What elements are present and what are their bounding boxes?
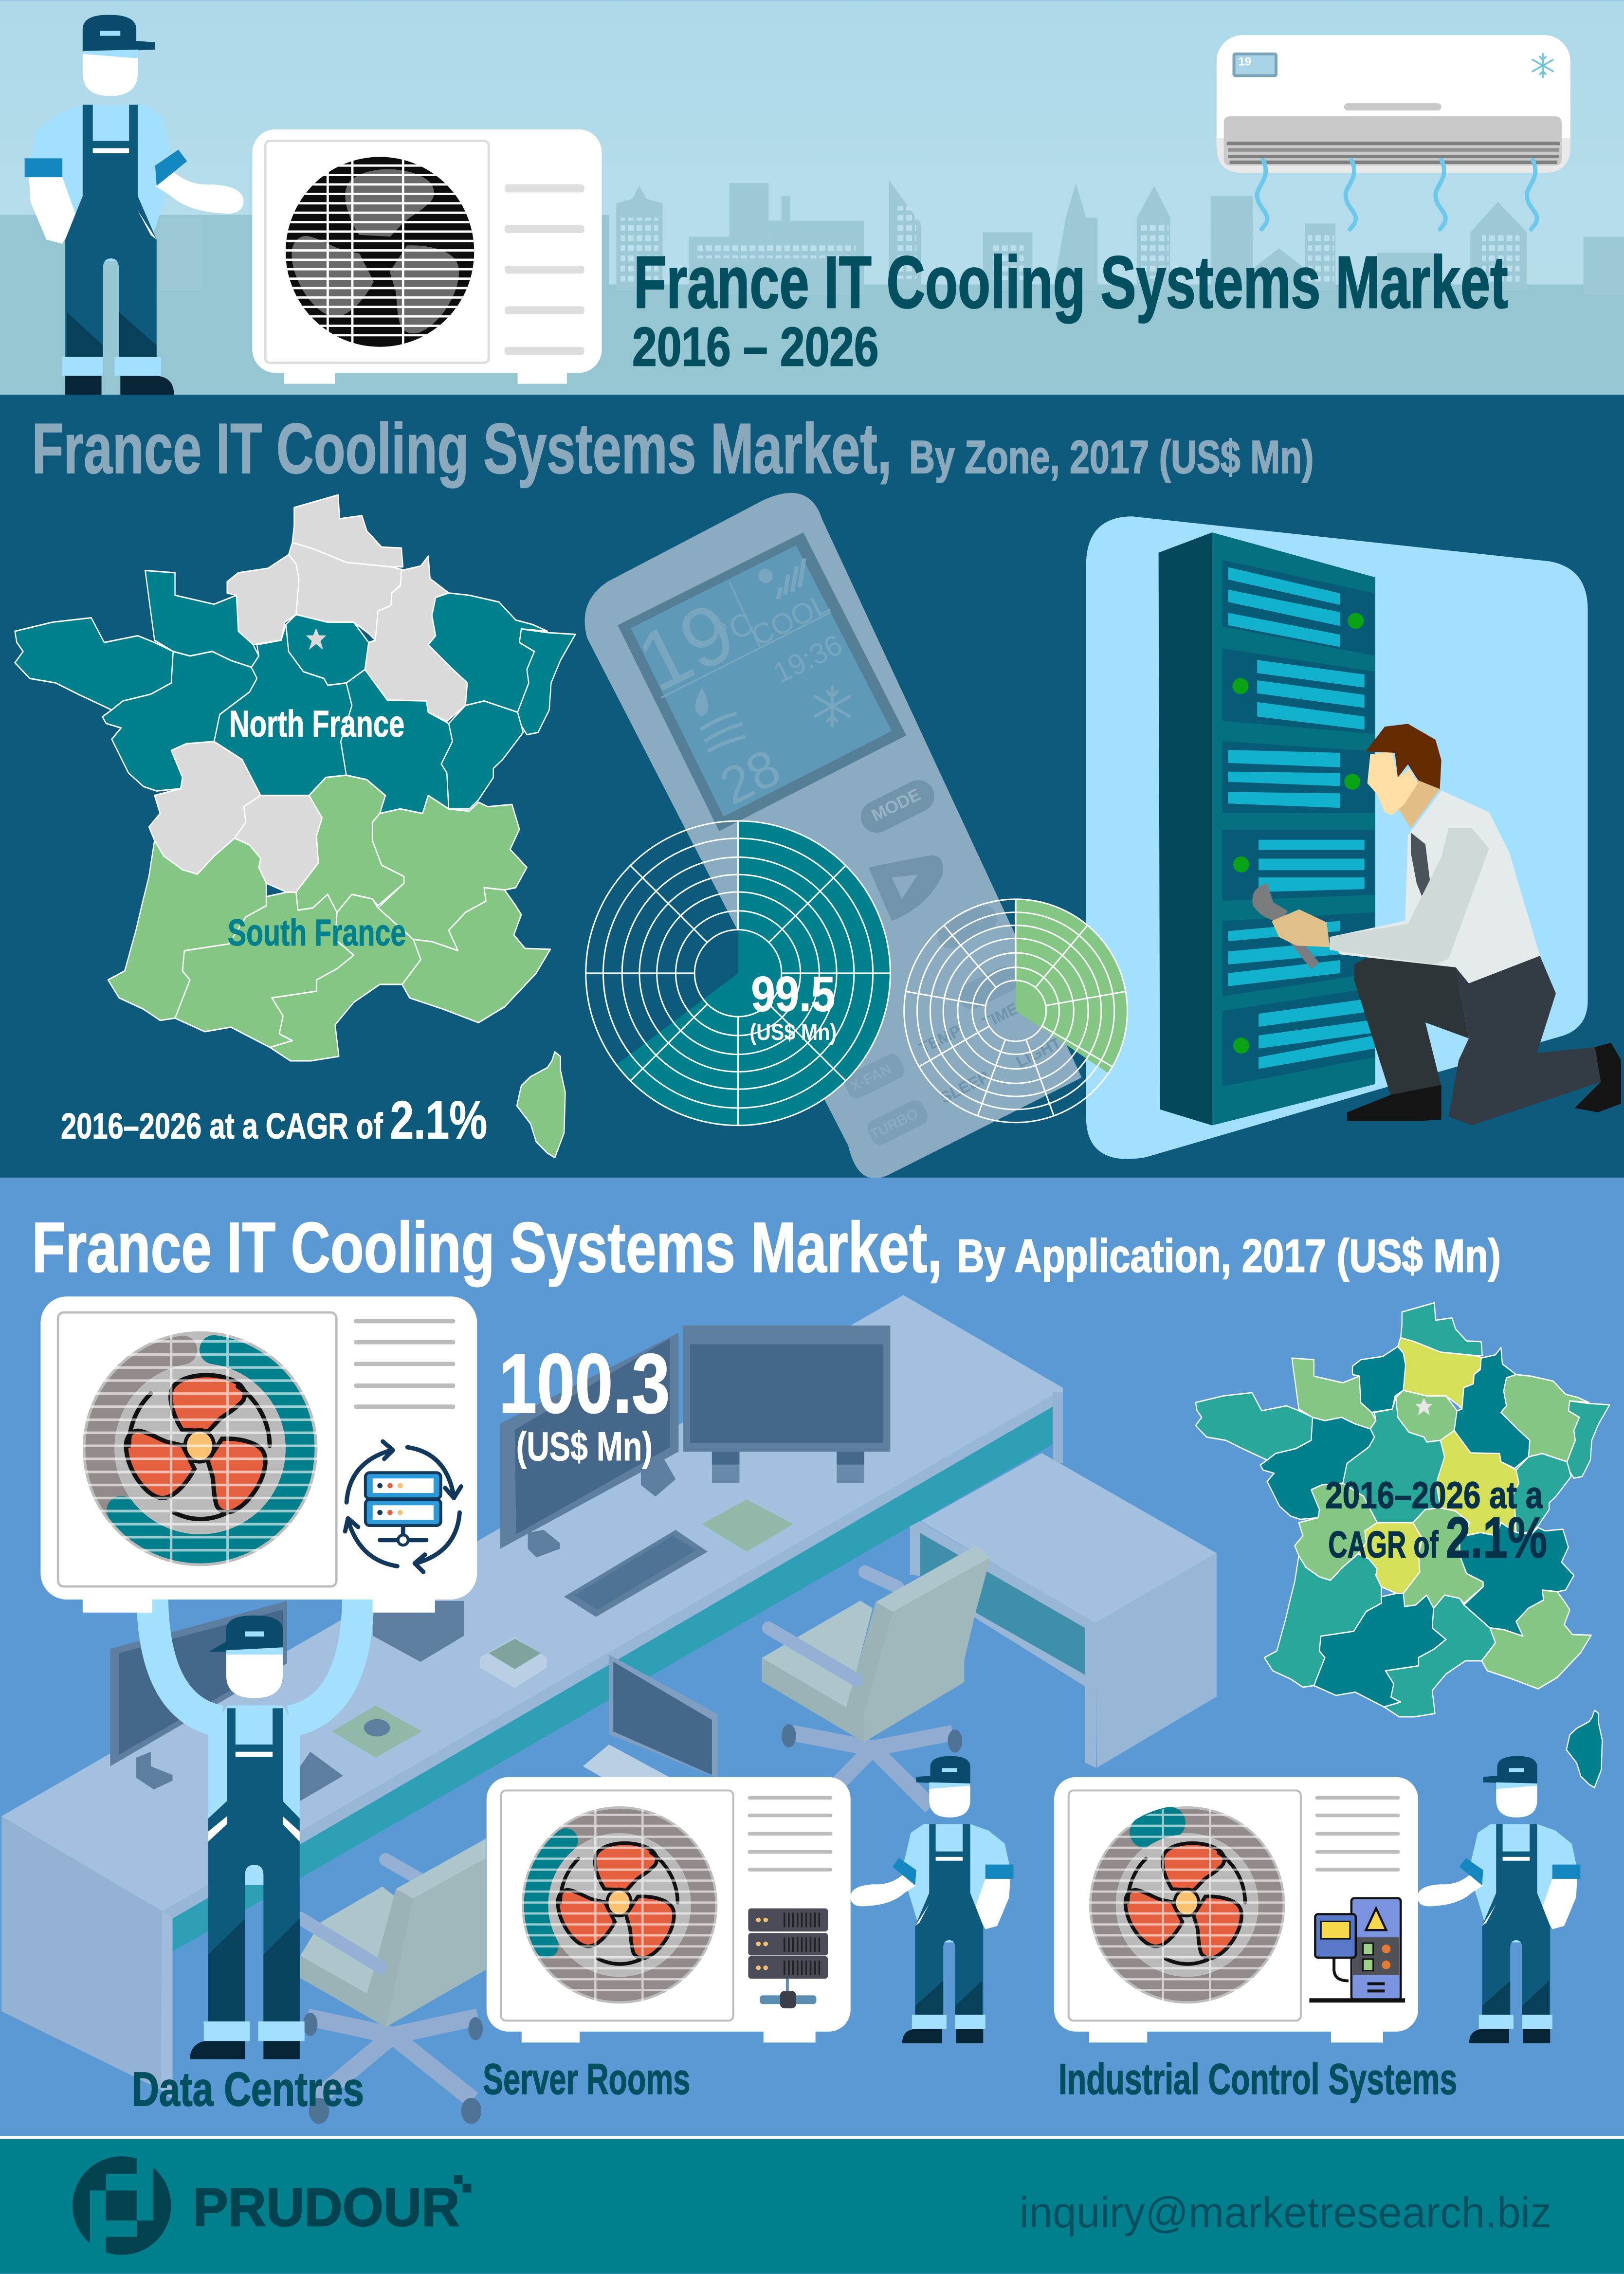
heading: by zone: France IT Cooling Systems Market,: [32, 409, 892, 488]
label: North France: North France: [229, 703, 404, 745]
label: South France: South France: [228, 912, 406, 954]
icon: technician industrial control: [1417, 1756, 1580, 2043]
icon: split air conditioner indoor unit: [1217, 35, 1570, 229]
icon: remote control: MODE: [868, 784, 924, 825]
icon: technician server rooms: [850, 1756, 1013, 2043]
unit label: (US$ Mn): [516, 1423, 653, 1469]
icon: split air conditioner indoor unit: 19: [1238, 55, 1251, 69]
icon: server with cycle arrows: [345, 1441, 461, 1572]
callout: CAGR by application: CAGR of: [1328, 1524, 1439, 1566]
illustration: office chair left: [300, 1839, 486, 2124]
chart: radial share south france: [904, 899, 1128, 1123]
icon: remote control: 19:36: [768, 628, 847, 690]
heading: by application: France IT Cooling Systems Market,: [32, 1208, 943, 1287]
callout: CAGR by application: 2016–2026 at a: [1325, 1474, 1543, 1516]
icon: server rack: [1159, 532, 1375, 1126]
label: Server Rooms: Server Rooms: [483, 2055, 690, 2103]
icon: remote control: SLEEP: [937, 1067, 992, 1107]
icon: remote control: COOL: [746, 587, 834, 653]
icon: Paris star: [306, 628, 326, 650]
icon: Prudour logo: [73, 2152, 171, 2257]
chart: radial share north france: [586, 821, 890, 1126]
panel: light blue server backdrop: [1086, 516, 1588, 1159]
icon: remote control: TEMP: [916, 1021, 964, 1057]
header background with skyline: [0, 0, 1624, 395]
icon: remote control: LIGHT: [1013, 1034, 1064, 1071]
icon: remote control: X-FAN: [848, 1061, 894, 1094]
panel: by zone: [0, 395, 1624, 1178]
panel: by application: [0, 1178, 1624, 2136]
icon: technician lifting unit: [152, 1592, 358, 2059]
callout: CAGR north and south: 2.1%: [390, 1090, 487, 1150]
heading: by zone: By Zone, 2017 (US$ Mn): [909, 432, 1314, 483]
logo accent squares: [454, 2175, 471, 2193]
label: Data Centres: Data Centres: [132, 2062, 364, 2116]
callout: CAGR by application: 2.1%: [1446, 1506, 1547, 1570]
icon: remote control: TURBO: [867, 1106, 921, 1143]
illustration: isometric office desks: [1, 1295, 1217, 2124]
icon: outdoor AC unit: [252, 129, 602, 384]
callout: CAGR by application: [1325, 1474, 1547, 1570]
icon: AC unit data centres: [40, 1296, 477, 1613]
callout: CAGR north and south: 2016–2026 at a CAGR of: [61, 1106, 383, 1146]
callout: CAGR north and south: [61, 1090, 487, 1150]
icon: control cabinet: [1309, 1898, 1405, 2002]
map: France by region: [1196, 1303, 1609, 1787]
logo wordmark: PRUDOUR: [193, 2178, 459, 2238]
icon: remote control: 19: [623, 584, 748, 710]
icon: AC unit server rooms: [487, 1777, 851, 2042]
icon: remote control: TIMER: [979, 994, 1031, 1032]
icon: Paris star: [1415, 1398, 1433, 1416]
unit label: (US$ Mn): [749, 1019, 837, 1045]
heading: by application: By Application, 2017 (US$ Mn): [957, 1231, 1501, 1282]
subtitle years: 2016 – 2026: [632, 316, 879, 377]
icon: server stack: [748, 1909, 828, 2008]
icon: remote control: 28: [711, 738, 789, 816]
contact email: inquiry@marketresearch.biz: [1020, 2188, 1551, 2237]
map: France by north and south zones: [15, 495, 575, 1158]
label: Industrial Control Systems: Industrial Control Systems: [1058, 2055, 1457, 2103]
value: 100.3: 100.3: [499, 1337, 670, 1431]
value: 99.5: 99.5: [751, 966, 835, 1021]
icon: technician standing: [25, 15, 244, 395]
illustration: office chair right: [762, 1546, 991, 1807]
icon: AC unit industrial control: [1054, 1777, 1418, 2042]
icon: technician kneeling at rack: [1252, 724, 1621, 1126]
icon: remote control: [584, 493, 1082, 1178]
icon: remote control: °C: [712, 605, 759, 653]
footer: [0, 2136, 1624, 2274]
